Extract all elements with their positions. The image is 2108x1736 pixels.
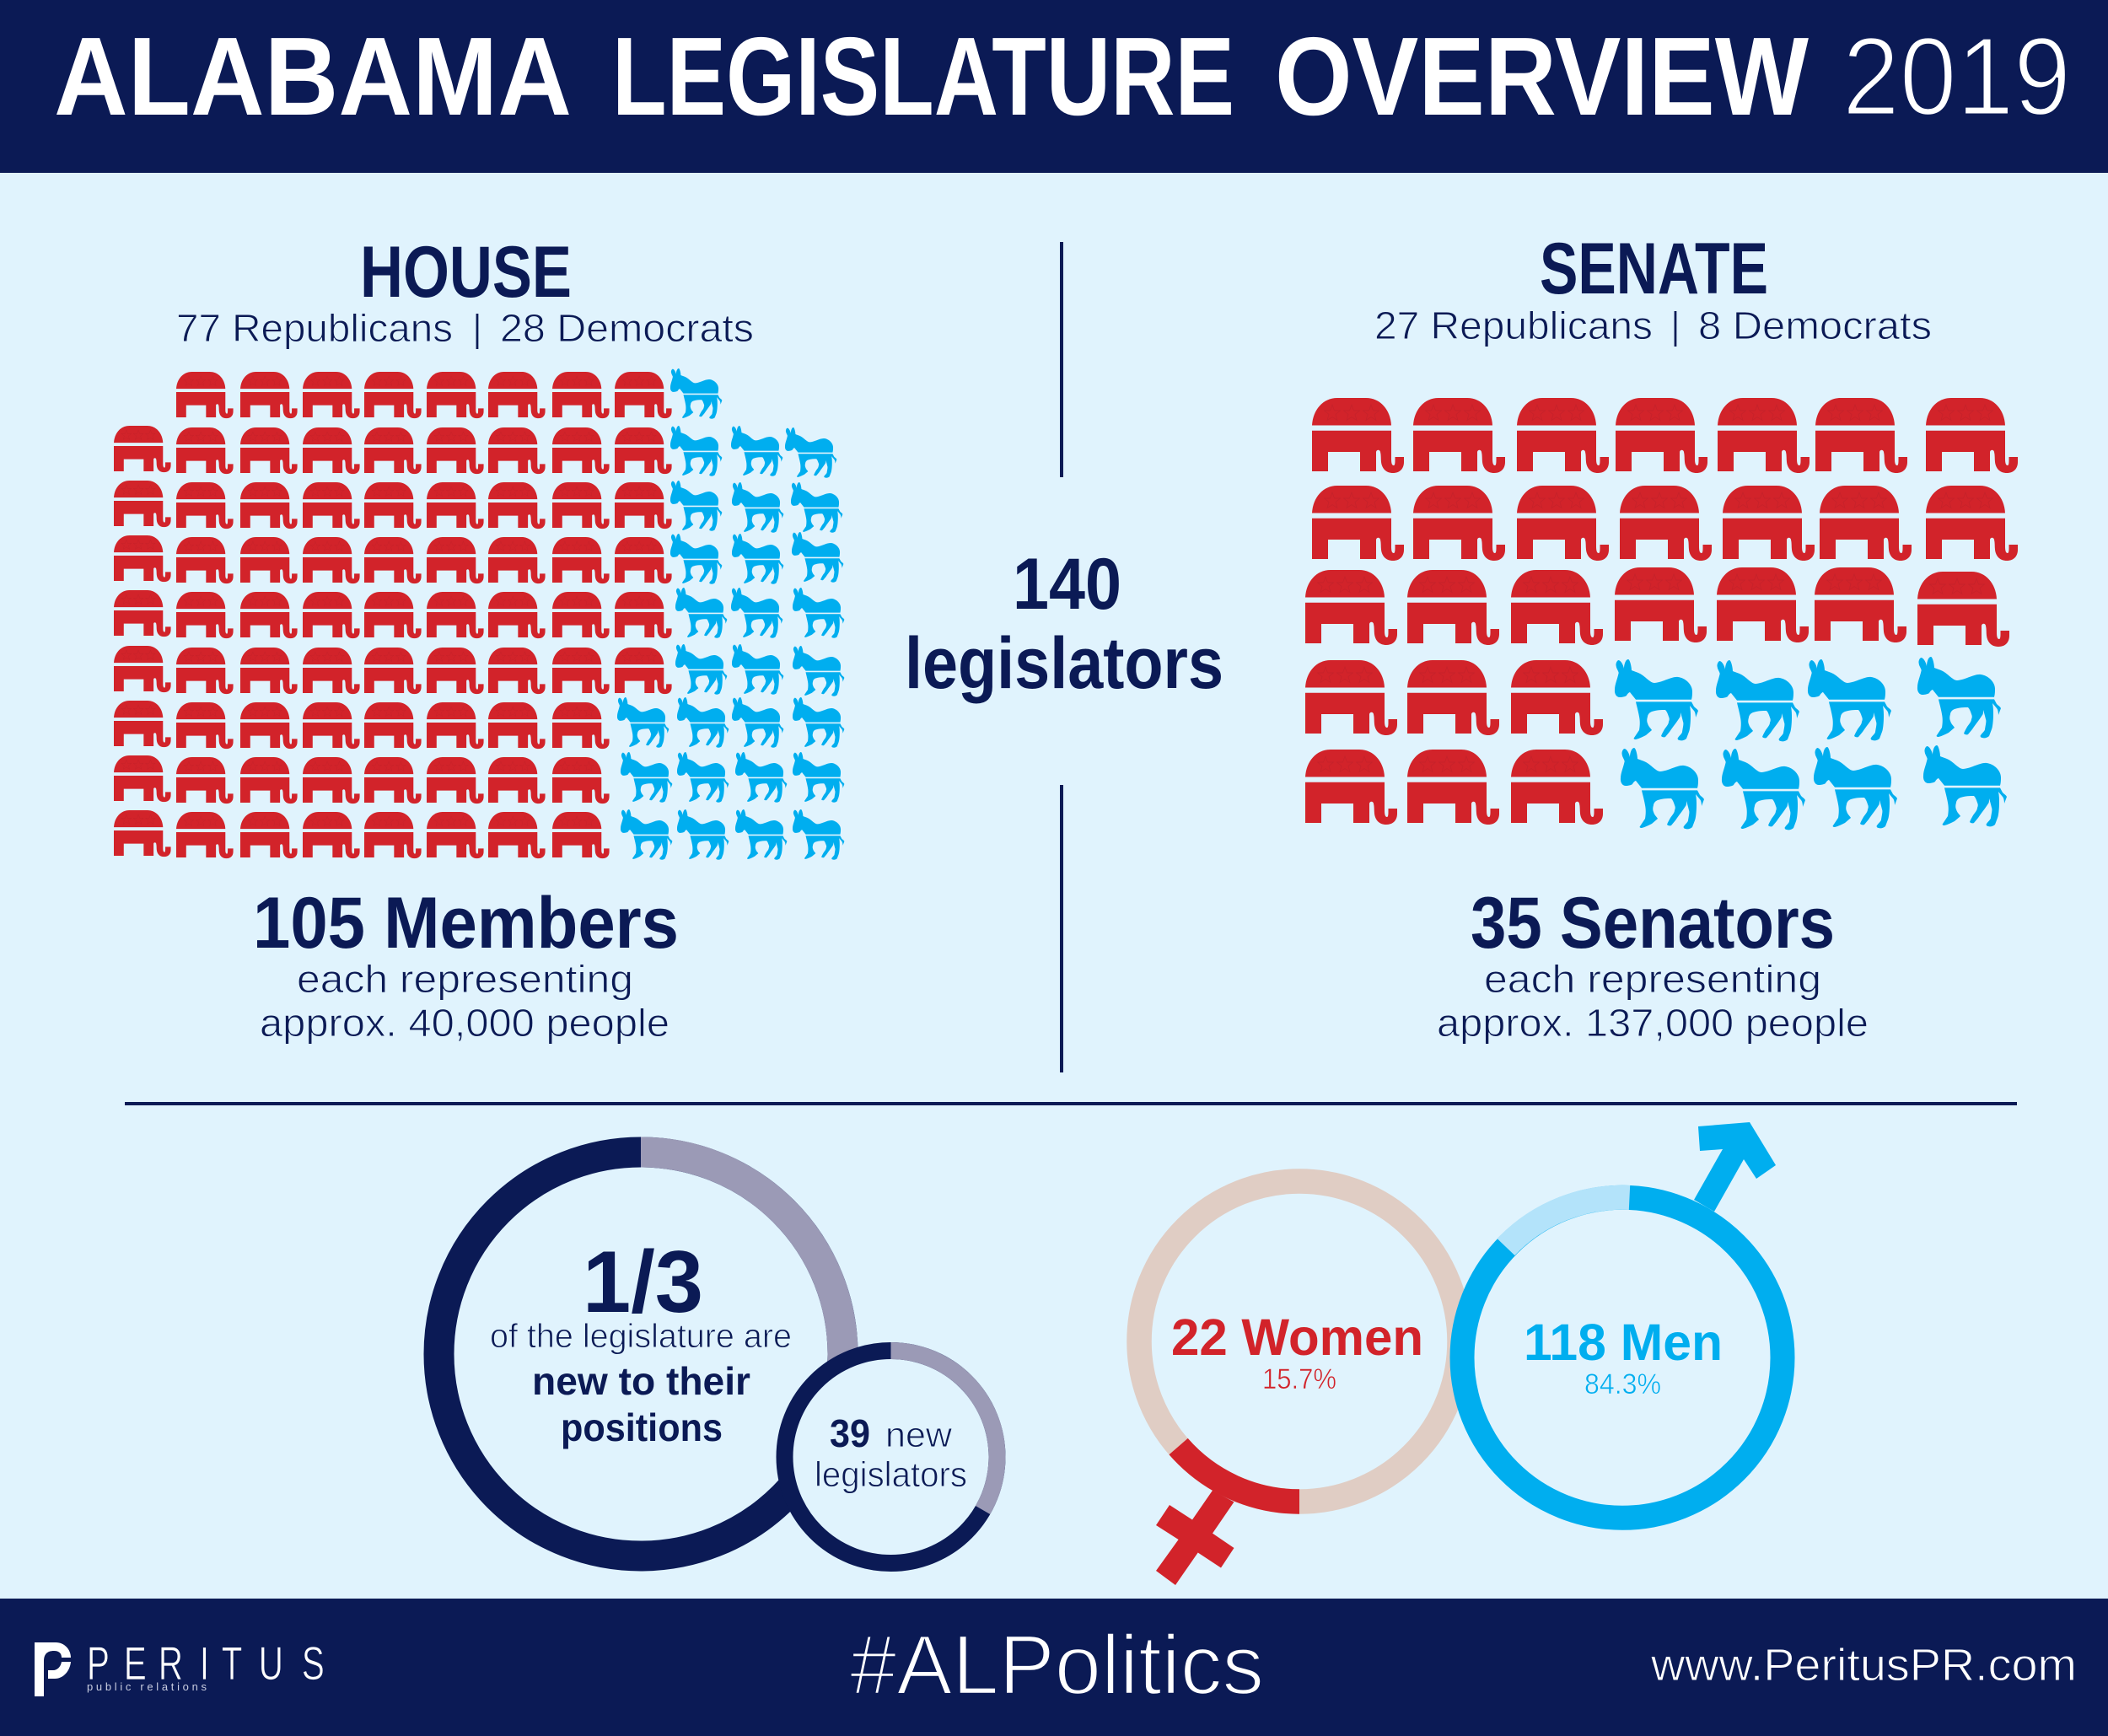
small ring label: 39 — [830, 1411, 870, 1455]
senate republican elephants — [1305, 398, 2018, 825]
senate heading: SENATE — [1540, 228, 1768, 309]
house democrat donkeys — [617, 368, 844, 860]
title: OVERVIEW — [1275, 14, 1809, 138]
senate representation note: each representing — [1484, 957, 1821, 1001]
senate party split: | — [1670, 304, 1680, 347]
title: LEGISLATURE — [612, 14, 1234, 138]
title: ALABAMA — [54, 14, 572, 138]
house representation note: each representing — [297, 957, 633, 1001]
total legislators: 140 — [1013, 544, 1121, 625]
website: www.PeritusPR.com — [1650, 1640, 2077, 1690]
house party split — [176, 306, 754, 350]
men count — [1524, 1314, 1723, 1400]
men ring with mars symbol — [1462, 1122, 1783, 1518]
peritus logo: public relations — [87, 1680, 207, 1693]
peritus logo: PERITUS — [87, 1638, 325, 1690]
women count: 15.7% — [1262, 1363, 1336, 1395]
hashtag: #ALPolitics — [850, 1618, 1264, 1712]
footer band — [0, 1599, 2108, 1736]
large ring label: 1/3 — [583, 1233, 703, 1331]
house heading: HOUSE — [360, 232, 572, 313]
senate representation note — [1437, 957, 1869, 1045]
men count: 84.3% — [1584, 1368, 1661, 1400]
senate representation note: approx. 137,000 people — [1437, 1001, 1869, 1045]
house party split: 77 Republicans — [176, 306, 453, 350]
house republican elephants — [114, 372, 672, 858]
title: 2019 — [1842, 14, 2071, 138]
small ring label: new — [885, 1415, 953, 1454]
senate democrat donkeys — [1615, 657, 2007, 830]
title — [54, 14, 2071, 138]
senate party split — [1374, 304, 1932, 347]
large ring: one third new — [438, 1152, 843, 1556]
senate party split: 8 Democrats — [1698, 304, 1932, 347]
women count: 22 Women — [1171, 1309, 1423, 1366]
large ring label — [490, 1233, 792, 1449]
senator count: 35 Senators — [1471, 883, 1835, 964]
senate party split: 27 Republicans — [1374, 304, 1653, 347]
panel: house — [114, 232, 844, 1045]
small ring label: legislators — [815, 1454, 967, 1494]
house representation note — [260, 957, 670, 1045]
house party split: | — [472, 306, 482, 350]
centre column dividers — [1060, 242, 1063, 1072]
small ring: 39 new legislators — [784, 1351, 997, 1563]
large ring label: of the legislature are — [490, 1318, 792, 1355]
panel: senate — [1305, 228, 2018, 1045]
header band — [0, 0, 2108, 173]
women count — [1171, 1309, 1423, 1395]
men count: 118 Men — [1524, 1314, 1723, 1371]
house party split: 28 Democrats — [500, 306, 754, 350]
house representation note: approx. 40,000 people — [260, 1001, 670, 1045]
total legislators — [905, 544, 1223, 704]
large ring label: new to their — [532, 1359, 750, 1403]
small ring label — [815, 1411, 967, 1494]
women ring with venus symbol — [1139, 1181, 1460, 1585]
large ring label: positions — [561, 1405, 723, 1449]
house member count: 105 Members — [253, 883, 679, 964]
total legislators: legislators — [905, 623, 1223, 704]
panel: gender rings — [1139, 1122, 1783, 1585]
panel: new legislators rings — [438, 1152, 997, 1563]
